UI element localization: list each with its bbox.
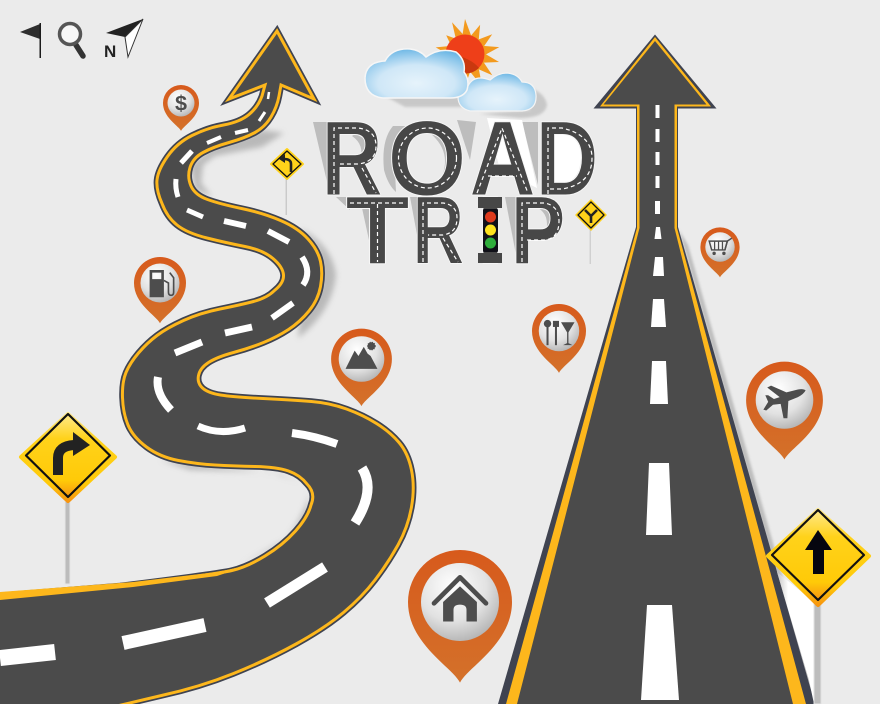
- word: TRIP: T: [346, 177, 409, 284]
- road edge: [0, 31, 413, 704]
- straight road with arrow: [498, 34, 815, 704]
- pin: airplane: [746, 362, 823, 460]
- icon: flag: [20, 23, 41, 58]
- road markings on letters: [334, 128, 592, 262]
- yellow edge line: [506, 37, 806, 704]
- white light beam: [487, 118, 537, 188]
- pin: shopping cart: [700, 227, 740, 277]
- small cloud: [458, 73, 536, 111]
- road shadow: [679, 230, 815, 704]
- icon: traffic light: [483, 209, 498, 252]
- word: TRIP: I: [477, 177, 504, 284]
- word: ROAD: O: [388, 100, 466, 218]
- letter shadows: [313, 120, 552, 263]
- winding road with arrow: [0, 31, 413, 704]
- thick yellow edge in the foreground: [0, 565, 250, 600]
- centre line dashes: [0, 92, 368, 658]
- sign: small fork: [576, 200, 606, 264]
- icon: magnifier: [60, 24, 83, 56]
- pin: dollar: [163, 85, 199, 131]
- centre line dashes: [641, 105, 679, 700]
- large cloud: [365, 49, 468, 98]
- word: ROAD: R: [322, 100, 382, 218]
- pin: food and drink: [532, 304, 586, 373]
- sign: straight ahead: [768, 510, 869, 704]
- icon: compass north pointer: N: [104, 42, 116, 61]
- sign: right turn: [21, 414, 115, 584]
- road shadows: [160, 130, 336, 565]
- road edge: [498, 34, 815, 704]
- D counter: [554, 130, 581, 187]
- pin: home: [408, 550, 512, 683]
- title: ROAD TRIP: [313, 100, 598, 284]
- road surface: [517, 41, 793, 704]
- letter I bars: [478, 197, 502, 263]
- pin: mountain: [331, 329, 392, 406]
- clouds and sun: [365, 19, 547, 118]
- pin: fuel: [134, 257, 186, 323]
- sun: [435, 19, 500, 90]
- word: TRIP: P: [511, 177, 565, 284]
- road surface with yellow edge line: [0, 31, 413, 704]
- word: ROAD: D: [536, 100, 598, 218]
- word: TRIP: R: [413, 177, 464, 284]
- icon: compass north pointer: [104, 19, 143, 61]
- pin: dollar: $: [175, 91, 187, 116]
- sign: small left bend: [271, 149, 303, 215]
- word: ROAD: A: [470, 100, 535, 218]
- cloud shadows: [385, 85, 547, 118]
